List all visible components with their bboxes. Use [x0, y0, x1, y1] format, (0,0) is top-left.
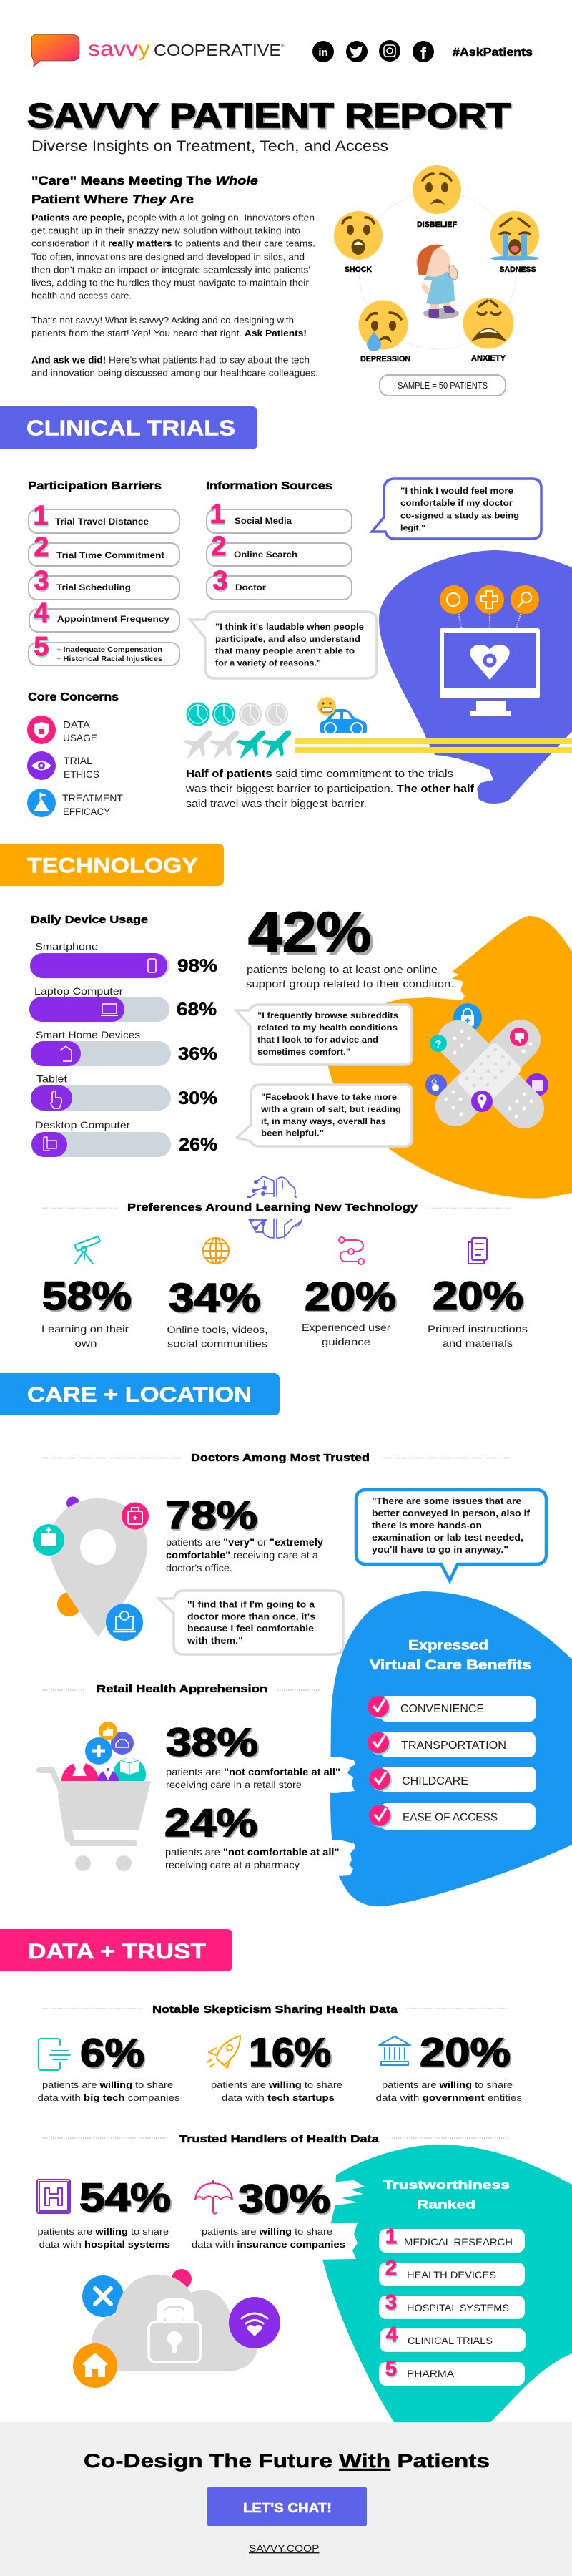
stat: 78 percent: comfortable" receiving care at a	[166, 1549, 318, 1561]
concern: data usage: USAGE	[63, 732, 97, 743]
core concerns	[27, 691, 123, 817]
quote: facebook: it, in many ways, overall has	[261, 1116, 386, 1126]
face: depression: DEPRESSION	[360, 355, 410, 364]
intro paragraph: And ask we did! Here's what patients had to say about the tech	[31, 355, 310, 365]
stat: 34 percent: Online tools, videos,	[167, 1324, 267, 1335]
bar: smart home 36%: Smart Home Devices	[36, 1029, 140, 1040]
quote: doctor co-signed: co-signed a study as being	[400, 511, 519, 521]
heading: information sources: Information Sources	[206, 480, 332, 492]
text: retail store	[166, 1766, 340, 1790]
text: half of patients: said travel was their biggest barrier.	[186, 799, 367, 810]
ranked list: information sources: 1	[209, 499, 225, 530]
barrier items: Trial Scheduling	[56, 582, 131, 592]
stat: 20 percent guidance	[302, 1237, 396, 1347]
stat: 34 percent	[167, 1238, 267, 1350]
logo wordmark: savv y	[88, 37, 150, 61]
stat: 78 percent: 78%	[165, 1493, 257, 1537]
rank 1: 1	[385, 2225, 397, 2248]
illustration: shopping cart	[39, 1722, 151, 1871]
icon: globe	[203, 1238, 229, 1264]
bar: smartphone 98%: Smartphone	[35, 940, 98, 952]
illustration: child in gown	[416, 245, 459, 319]
intro paragraph: consideration if it really matters to patients and their care teams.	[31, 239, 315, 249]
stat: 58 percent: 58%	[42, 1273, 132, 1318]
icon: phone	[39, 2039, 70, 2070]
concern: trial ethics: ETHICS	[64, 769, 99, 780]
stat: 42 percent: 42%	[248, 900, 371, 964]
barrier items: Trial Travel Distance	[55, 517, 149, 527]
section banner: clinical trials	[0, 406, 257, 449]
barrier items: Trial Time Commitment	[56, 550, 164, 560]
stat: 34 percent: 34%	[169, 1275, 260, 1319]
quote: in person: "There are some issues that are	[372, 1496, 521, 1506]
quote: doctor co-signed	[372, 479, 541, 539]
section banner: care + location	[0, 1373, 280, 1415]
stat: 16 percent startups: 16%	[249, 2029, 331, 2074]
quote: doctor co-signed: comfortable if my doctor	[400, 498, 513, 508]
quote: in person: you'll have to go in anyway."	[372, 1545, 508, 1555]
barrier items: + Historical Racial Injustices	[56, 655, 162, 663]
icon: document	[468, 1238, 487, 1264]
text: half of patients: was their biggest barrier to participation. The other half	[185, 784, 474, 795]
stat: 6 percent big tech	[37, 2030, 179, 2103]
rank 2: HEALTH DEVICES	[407, 2269, 496, 2280]
stat: 20 percent guidance: guidance	[322, 1336, 370, 1347]
benefit: transportation: TRANSPORTATION	[401, 1740, 506, 1752]
quote: laudable: for a variety of reasons."	[215, 658, 321, 668]
yellow road lines	[295, 738, 572, 753]
intro paragraph: and innovation being discussed among our healthcare colleagues.	[31, 368, 318, 378]
sample size pill	[380, 375, 506, 396]
title: SAVVY PATIENT REPORT	[27, 97, 511, 135]
button	[207, 2487, 367, 2526]
stat: 20 percent printed: 20%	[433, 1273, 523, 1318]
illustration: location pin	[33, 1497, 149, 1641]
intro paragraph: Patients are people, people with a lot going on. Innovators often	[31, 213, 315, 223]
concern: treatment efficacy	[27, 789, 123, 817]
concern: treatment efficacy: EFFICACY	[63, 806, 111, 817]
stat: 20 percent government: data with government entities	[376, 2093, 522, 2103]
benefit: childcare	[369, 1767, 536, 1792]
intro heading: Patient Where They Are	[31, 192, 194, 206]
icon: package bubble	[113, 1757, 146, 1781]
benefit: convenience: CONVENIENCE	[400, 1703, 484, 1715]
section banner: clinical trials: CLINICAL TRIALS	[26, 415, 235, 441]
heading: Ranked	[417, 2197, 475, 2211]
time vs travel icons	[183, 697, 572, 810]
icon: lock	[149, 2299, 201, 2362]
stat: 6 percent big tech: data with big tech companies	[37, 2093, 179, 2103]
footer link: SAVVY.COOP	[249, 2542, 319, 2554]
brush edges on blue blob	[315, 1757, 355, 1876]
rank 4	[380, 2323, 526, 2352]
section banner: technology: TECHNOLOGY	[27, 854, 198, 877]
quote: subreddits: that I look to for advice and	[257, 1035, 378, 1045]
barrier items: 1	[33, 501, 49, 531]
ranked list: information sources: 3	[212, 566, 228, 596]
icon: rocket	[207, 2036, 240, 2068]
stat: 42 percent: support group related to their condition.	[246, 979, 454, 990]
rank 4: 4	[386, 2323, 398, 2346]
concern: trial ethics	[27, 751, 99, 780]
face: disbelief: DISBELIEF	[417, 220, 457, 229]
icon: hospital	[33, 1524, 64, 1556]
sample size pill: SAMPLE = 50 PATIENTS	[398, 380, 488, 391]
quote: in person: examination or lab test needed,	[372, 1533, 523, 1543]
intro paragraph	[31, 213, 318, 378]
quote: facebook: been helpful."	[261, 1128, 324, 1138]
heading: participation barriers: Participation Barriers	[28, 480, 162, 492]
stat: 30 percent insurance: data with insurance companies	[192, 2240, 345, 2250]
stat: 16 percent startups	[207, 2029, 342, 2103]
icon: telescope	[74, 1236, 100, 1264]
bar: desktop 26%: Desktop Computer	[35, 1119, 130, 1131]
stat: 34 percent: social communities	[167, 1338, 267, 1350]
bar: laptop 68%: 68%	[177, 1000, 217, 1020]
icon: pharmacy bubble	[61, 1762, 99, 1781]
heading: preferences	[42, 1198, 510, 1219]
bar: desktop 26%	[31, 1119, 217, 1157]
icon: question mark: ?	[435, 1038, 442, 1050]
section banner: data + trust	[0, 1929, 232, 1971]
subtitle: Diverse Insights on Treatment, Tech, and Access	[31, 138, 388, 155]
rank 3: 3	[385, 2291, 397, 2314]
quote: subreddits: related to my health conditions	[257, 1023, 398, 1033]
text: retail store: receiving care in a retail store	[166, 1779, 302, 1790]
logo wordmark: ®	[281, 44, 285, 49]
social icon: twitter	[346, 41, 368, 62]
intro paragraph: then don't make an impact or integrate seamlessly into patients'	[31, 265, 310, 275]
stat: 54 percent hospital: 54%	[79, 2175, 171, 2220]
social icon: linkedin: in	[318, 47, 328, 59]
icon: path	[339, 1237, 364, 1264]
rank 1	[379, 2225, 525, 2253]
benefit: ease of access	[369, 1803, 536, 1830]
stat: 58 percent	[41, 1236, 132, 1349]
concern: data usage	[27, 716, 97, 744]
benefit: convenience	[368, 1696, 536, 1722]
quote: subreddits: "I frequently browse subreddits	[257, 1010, 398, 1020]
quote: subreddits: sometimes comfort."	[257, 1047, 350, 1057]
quote: comfortable	[159, 1591, 343, 1654]
stat: 42 percent: patients belong to at least one online	[247, 965, 438, 976]
rank 5: PHARMA	[407, 2368, 455, 2379]
orange blob	[328, 916, 572, 1199]
stat: 54 percent hospital	[37, 2175, 171, 2250]
intro paragraph: lives, adding to the hurdles they must navigate to maintain their	[31, 278, 309, 288]
section banner: technology	[0, 844, 224, 886]
quote: facebook: "Facebook I have to take more	[261, 1092, 397, 1102]
stat: 30 percent insurance	[192, 2176, 345, 2250]
icon: plus bubble	[85, 1737, 112, 1765]
text: half of patients: Half of patients said time commitment to the trials	[186, 769, 453, 780]
section banner: care + location: CARE + LOCATION	[27, 1383, 252, 1407]
quote: doctor co-signed: "I think I would feel more	[400, 486, 513, 496]
stat: 30 percent insurance: 30%	[238, 2176, 330, 2221]
icon: thumbs down	[510, 1028, 528, 1046]
stat: 6 percent big tech: 6%	[80, 2030, 144, 2075]
stat: 38 percent: 38%	[166, 1720, 258, 1765]
face: anxiety: ANXIETY	[471, 354, 506, 363]
heading	[370, 1639, 531, 1673]
bar: laptop 68%: Laptop Computer	[34, 985, 123, 997]
bar: tablet 30%	[31, 1073, 217, 1111]
rank 2	[379, 2257, 525, 2286]
intro paragraph: patients from the start! Yep! You heard that right. Ask Patients!	[31, 328, 307, 338]
bar: tablet 30%: Tablet	[36, 1073, 67, 1085]
stat: 16 percent startups: patients are willing to share	[211, 2080, 342, 2090]
icon: question mark	[430, 1035, 447, 1052]
icon: thumbs up bubble	[99, 1722, 117, 1740]
stat: 20 percent guidance: Experienced user	[302, 1322, 390, 1333]
bar: smartphone 98%	[30, 940, 217, 978]
stat: 20 percent government	[376, 2029, 522, 2103]
benefit: transportation	[368, 1732, 536, 1757]
emotion wheel	[334, 165, 539, 396]
ranked list: information sources: Social Media	[235, 516, 292, 526]
icon: pin bubble	[97, 1765, 119, 1781]
intro paragraph: That's not savvy! What is savvy? Asking and co-designing with	[31, 316, 294, 326]
bar: smartphone 98%: 98%	[177, 956, 217, 976]
ranked list: information sources: 2	[211, 532, 227, 562]
icon: car with emoji	[317, 697, 367, 734]
stat: 42 percent	[246, 900, 454, 990]
barrier items: Appointment Frequency	[57, 614, 169, 624]
quote: facebook	[237, 1085, 412, 1146]
stat: 58 percent: Learning on their	[41, 1323, 129, 1335]
ranked list: information sources: Doctor	[235, 582, 266, 592]
teal blob: trustworthiness	[315, 2145, 572, 2422]
intro paragraph: Too often, innovations are designed and developed in silos, and	[31, 252, 305, 262]
benefit: ease of access: EASE OF ACCESS	[403, 1812, 498, 1823]
logo wordmark	[88, 37, 285, 61]
icon: pills behind bandage	[425, 1074, 447, 1096]
barrier items	[33, 501, 169, 663]
ranked list: information sources	[207, 499, 352, 600]
rank 4: CLINICAL TRIALS	[408, 2335, 493, 2346]
bar: smart home 36%: 36%	[178, 1044, 217, 1064]
footer panel	[0, 2422, 572, 2576]
quote: comfortable: with them."	[187, 1636, 243, 1646]
illustration: crossed bandages	[425, 1003, 548, 1118]
icon: car bubble	[111, 1732, 134, 1755]
face: sadness: SADNESS	[499, 265, 536, 274]
stat: 78 percent: doctor's office.	[166, 1562, 232, 1574]
stat: 54 percent hospital: patients are willing to share	[37, 2227, 169, 2237]
icon: blue x	[82, 2275, 124, 2317]
intro text block	[31, 174, 318, 378]
stat: 16 percent startups: data with tech startups	[222, 2093, 335, 2103]
heading: trusted handlers: Trusted Handlers of Health Data	[179, 2134, 380, 2145]
concern: trial ethics: TRIAL	[64, 755, 92, 766]
face: sadness	[490, 211, 539, 274]
text: pharmacy: receiving care at a pharmacy	[165, 1859, 300, 1870]
icon: planes	[183, 731, 291, 758]
icon: first aid kit	[122, 1503, 149, 1530]
intro heading	[31, 174, 258, 206]
virtual care benefits	[368, 1639, 536, 1830]
text: retail store: patients are "not comfortable at all"	[166, 1766, 340, 1777]
text: pharmacy	[165, 1846, 339, 1870]
cart body	[39, 1770, 151, 1871]
heading: daily device usage: Daily Device Usage	[31, 914, 148, 926]
quote: laudable	[190, 612, 377, 678]
rank 3	[379, 2291, 525, 2319]
call to action heading: Co-Design The Future With Patients	[84, 2450, 490, 2472]
bar chart: device usage	[29, 940, 217, 1157]
stat: 6 percent big tech: patients are willing to share	[42, 2080, 173, 2090]
button: LET'S CHAT!	[243, 2501, 332, 2515]
stat: 20 percent government: 20%	[420, 2029, 511, 2074]
intro paragraph: health and access care.	[31, 291, 132, 301]
bar: laptop 68%	[29, 985, 217, 1022]
logo wordmark: COOPERATIVE	[154, 41, 281, 59]
bar: desktop 26%: 26%	[179, 1135, 217, 1155]
icon: location pin	[471, 1091, 493, 1112]
heading: retail health apprehension: Retail Health Apprehension	[97, 1683, 267, 1695]
blue blob with monitor	[379, 550, 572, 804]
rank 5: 5	[385, 2358, 397, 2381]
benefit: childcare: CHILDCARE	[402, 1775, 468, 1787]
quote: laudable: that many people aren't able to	[215, 645, 355, 655]
ranked list: barriers	[29, 509, 179, 665]
icon: home	[73, 2343, 117, 2388]
social icon: facebook	[413, 41, 434, 64]
face: shock: SHOCK	[345, 265, 372, 274]
icon: brain circuit	[247, 1176, 302, 1238]
quote: laudable: "I think it's laudable when people	[215, 622, 364, 632]
rank 3: HOSPITAL SYSTEMS	[407, 2302, 509, 2313]
text: pharmacy: patients are "not comfortable at all"	[165, 1846, 339, 1858]
face: anxiety	[463, 298, 513, 363]
barrier items: 5	[34, 632, 49, 662]
quote: facebook: with a grain of salt, but reading	[260, 1104, 401, 1114]
heading: doctors among most trusted: Doctors Among Most Trusted	[191, 1452, 370, 1464]
blue blob: virtual care	[330, 1591, 572, 1906]
illustration: cloud with lock	[73, 2269, 280, 2388]
icon: orange chat/plus/search circles	[440, 585, 539, 653]
bar: smart home 36%	[31, 1029, 217, 1066]
ranked list: information sources: Online Search	[234, 550, 297, 560]
stat: 30 percent insurance: patients are willing to share	[202, 2227, 332, 2237]
bar: tablet 30%: 30%	[178, 1088, 217, 1108]
social icon: instagram	[379, 40, 400, 62]
heading: Trustworthiness	[383, 2178, 510, 2192]
quote: comfortable: doctor more than once, it's	[187, 1611, 315, 1621]
quote: comfortable: because I feel comfortable	[187, 1624, 314, 1634]
stat: 20 percent guidance: 20%	[305, 1274, 396, 1319]
icon: hospital H	[37, 2180, 70, 2213]
stat: 78 percent: patients are "very" or "extremely	[166, 1536, 323, 1548]
hashtag: #AskPatients	[453, 47, 533, 59]
heading: Core Concerns	[28, 691, 119, 703]
icon: lock behind bandage	[453, 1003, 482, 1032]
icon: clocks	[187, 703, 288, 726]
face: disbelief	[413, 165, 461, 229]
stat: 78 percent	[165, 1493, 323, 1574]
quote: doctor co-signed: legit."	[400, 523, 425, 533]
section banner: data + trust: DATA + TRUST	[28, 1940, 206, 1963]
heading: notable skepticism: Notable Skepticism Sharing Health Data	[152, 2004, 398, 2016]
logo speech bubble	[31, 34, 79, 67]
barrier items: 4	[34, 598, 49, 628]
face: depression	[359, 301, 410, 364]
heading	[383, 2178, 510, 2211]
icon: telehealth doctor	[106, 1604, 143, 1641]
quote: in person	[356, 1490, 546, 1581]
icon: bank	[379, 2036, 410, 2065]
social icon: linkedin	[312, 41, 334, 62]
icon: monitor with heart	[440, 628, 540, 716]
icon: wifi heart	[229, 2297, 280, 2348]
stat: 20 percent printed: and materials	[443, 1337, 513, 1349]
concern: data usage: DATA	[63, 718, 91, 730]
quote: in person: there is more hands-on	[372, 1521, 482, 1531]
stat: 58 percent: own	[74, 1337, 97, 1349]
quote: comfortable: "I find that if I'm going to a	[187, 1600, 315, 1610]
stat: 20 percent printed: Printed instructions	[428, 1323, 528, 1335]
stat: 20 percent printed	[428, 1238, 528, 1349]
face: shock	[334, 211, 383, 274]
barrier items: 3	[34, 566, 49, 596]
concern: treatment efficacy: TREATMENT	[62, 792, 123, 804]
icon: building behind bandage	[526, 1073, 548, 1096]
heading: Virtual Care Benefits	[370, 1658, 531, 1673]
stat: 24 percent: 24%	[164, 1800, 257, 1845]
stat: 20 percent government: patients are willing to share	[382, 2080, 513, 2090]
text: half of patients	[185, 769, 474, 810]
barrier items: + Inadequate Compensation	[56, 646, 162, 654]
heading: Expressed	[408, 1639, 488, 1654]
intro paragraph: get caught up in their snazzy new solution without taking into	[31, 226, 300, 236]
social icon: facebook: f	[420, 44, 427, 64]
rank 1: MEDICAL RESEARCH	[404, 2236, 513, 2248]
barrier items: 2	[34, 532, 49, 562]
header: logo and social	[31, 34, 533, 67]
intro heading: "Care" Means Meeting The Whole	[31, 174, 258, 187]
heading: preferences: Preferences Around Learning New Technology	[127, 1201, 418, 1214]
rank 5	[379, 2358, 525, 2386]
quote: subreddits	[236, 1005, 412, 1065]
quote: in person: better conveyed in person, also if	[372, 1508, 531, 1518]
stat: 54 percent hospital: data with hospital systems	[39, 2240, 170, 2250]
rank 2: 2	[385, 2257, 397, 2280]
icon: small pink dot	[172, 2269, 192, 2289]
quote: laudable: participate, and also understand	[215, 634, 360, 644]
icon: umbrella	[195, 2180, 232, 2214]
trustworthiness ranking	[379, 2178, 526, 2386]
